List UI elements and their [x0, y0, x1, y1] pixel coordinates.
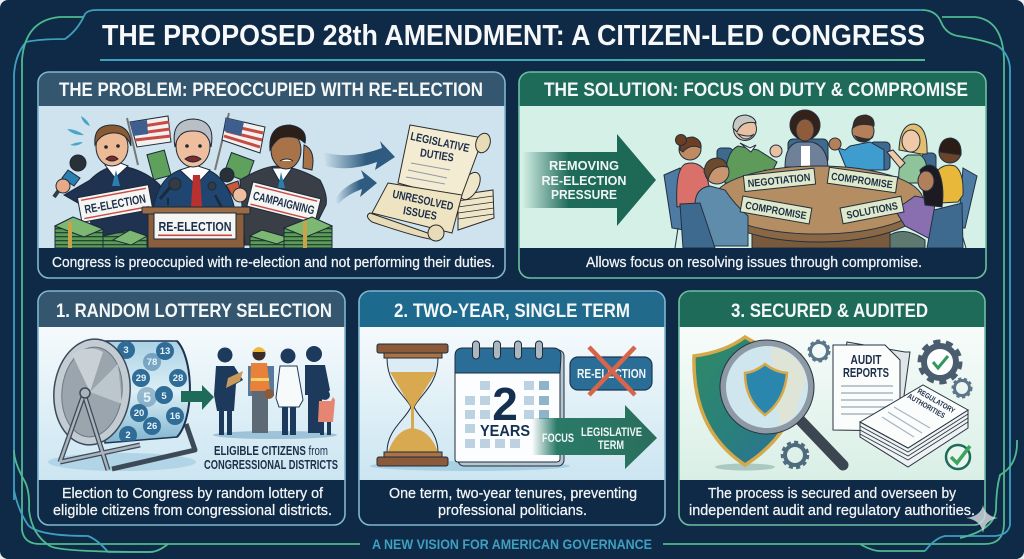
figure: right politician [240, 125, 326, 245]
lottery heading: 1. RANDOM LOTTERY SELECTION [56, 301, 332, 322]
panel: random lottery selection [38, 291, 345, 525]
lottery balls: 5 [143, 389, 151, 405]
label: congressional districts: CONGRESSIONAL DISTRICTS [204, 458, 338, 472]
term heading: 2. TWO-YEAR, SINGLE TERM [394, 301, 630, 322]
person: woman in centre [785, 110, 828, 167]
arrow: focus on legislative term: FOCUS [542, 433, 574, 445]
arrow: to citizens [181, 385, 214, 410]
term caption: professional politicians. [438, 503, 587, 519]
arrow: removing re-election pressure: PRESSURE [551, 187, 617, 202]
citizen: child [318, 390, 335, 435]
icon: cash behind politicians [147, 150, 254, 181]
icon: calendar [455, 341, 564, 466]
icon: money stacks left [55, 217, 147, 248]
person: woman in purple [890, 165, 943, 248]
drum body [100, 341, 190, 443]
problem heading: THE PROBLEM: PREOCCUPIED WITH RE-ELECTION [59, 80, 483, 101]
arrow: removing re-election pressure: RE-ELECTION [542, 173, 626, 188]
calendar number: 2 [492, 378, 518, 430]
drum face [49, 335, 135, 449]
figure: left politician [64, 125, 162, 250]
illustration: eligible citizens [213, 346, 337, 439]
chair front right [927, 203, 963, 248]
solution caption: Allows focus on resolving issues through compromise. [586, 255, 922, 271]
table [713, 166, 923, 248]
lottery border [38, 291, 345, 525]
solution caption band [519, 248, 986, 278]
icon: sparkle [966, 505, 998, 533]
lottery caption: eligible citizens from congressional districts. [53, 503, 332, 519]
term header band [359, 291, 665, 327]
sign: re-election left: RE-ELECTION [83, 191, 147, 217]
icon: handheld microphone left [54, 155, 86, 197]
illustration: stressed politicians at podium [54, 113, 332, 250]
person: man in yellow [938, 138, 963, 203]
person: man seen from behind [695, 158, 748, 246]
icon: audit reports document: AUDIT [850, 352, 882, 367]
arrow: focus on legislative term: LEGISLATIVE [581, 427, 642, 439]
chair front left [680, 203, 715, 248]
lottery caption band [38, 480, 345, 525]
chairs back row [717, 139, 936, 181]
illustration: lottery drum [48, 335, 196, 471]
figure: centre politician [153, 119, 235, 210]
audit caption [689, 486, 975, 519]
solution header band [519, 72, 986, 106]
document: unresolved issues: UNRESOLVED [391, 189, 454, 213]
sign: solutions: SOLUTIONS [846, 200, 899, 222]
term caption: One term, two-year tenures, preventing [389, 486, 637, 502]
icon: small gear right [953, 379, 971, 397]
citizen: doctor [276, 348, 303, 435]
sign: compromise top: COMPROMISE [830, 171, 893, 191]
calendar rings [472, 341, 542, 359]
illustration: citizens around a table [664, 110, 977, 248]
solution border [519, 72, 986, 278]
sign: podium re-election [154, 213, 236, 239]
sign: re-election left [77, 185, 153, 222]
citizen: man silhouette [305, 346, 330, 433]
sign: podium re-election: RE-ELECTION [158, 219, 232, 234]
term caption band [359, 480, 665, 525]
document: legislative duties: LEGISLATIVE [409, 131, 471, 155]
audit caption: independent audit and regulatory authorities. [689, 503, 975, 519]
arrow: removing re-election pressure: REMOVING [549, 158, 619, 173]
term border [359, 291, 665, 525]
title: THE PROPOSED 28th AMENDMENT: A CITIZEN-LED CONGRESS [102, 20, 925, 52]
audit caption: The process is secured and overseen by [708, 486, 957, 502]
icon: regulatory authorities stack: AUTHORITIES [906, 391, 947, 420]
drum stand [60, 388, 140, 470]
lottery header band [38, 291, 345, 327]
solution heading: THE SOLUTION: FOCUS ON DUTY & COMPROMISE [544, 80, 968, 101]
lottery balls: 5 [161, 391, 167, 402]
arrow: focus on legislative term [532, 405, 657, 469]
badge: crossed out re-election [570, 347, 652, 395]
panel: secured and audited [679, 291, 985, 525]
lottery balls [117, 341, 187, 444]
label: eligible citizens: ELIGIBLE CITIZENS from [214, 444, 328, 458]
calendar day squares [465, 381, 549, 448]
chair side left [664, 168, 684, 248]
arrows: duties ignored [323, 141, 395, 204]
lottery balls: 29 [136, 373, 146, 384]
shadow under objects [370, 461, 570, 471]
icon: paper stack [456, 169, 494, 230]
person: blonde woman [887, 124, 927, 183]
document: unresolved issues [367, 183, 462, 241]
arrow: focus on legislative term: TERM [598, 440, 624, 452]
panel: two-year single term [359, 291, 665, 525]
lottery balls: 28 [173, 373, 183, 384]
icon: podium [142, 207, 250, 248]
audit heading: 3. SECURED & AUDITED [731, 301, 928, 322]
citizen shadows [213, 431, 337, 439]
arrow: removing re-election pressure [522, 134, 656, 226]
lottery balls: 13 [160, 346, 170, 357]
drum stand rear [112, 424, 195, 469]
icon: shield [694, 337, 800, 465]
chair side right [958, 168, 977, 248]
icon: microphones on podium [160, 178, 222, 208]
icon: handheld microphone right [220, 168, 247, 202]
sign: compromise bottom: COMPROMISE [744, 200, 807, 222]
icon: hourglass [377, 344, 448, 466]
lottery balls: 78 [147, 357, 157, 368]
shield shadow [715, 464, 775, 470]
lottery balls: 26 [147, 421, 157, 432]
person: older man in green [725, 115, 782, 183]
icon: american flag right [215, 113, 265, 170]
icon: regulatory authorities stack: REGULATORY [916, 386, 957, 415]
icon: small gear top [809, 341, 829, 361]
problem caption: Congress is preoccupied with re-election and not performing their duties. [52, 255, 495, 271]
calendar label: YEARS [480, 423, 530, 440]
icon: small gear bottom [782, 442, 808, 468]
icon: regulatory authorities stack [860, 385, 968, 467]
drum rim [177, 341, 190, 437]
sign: campaigning: CAMPAIGNING [252, 189, 316, 217]
problem caption band [38, 248, 505, 278]
icon: audit reports document [833, 342, 910, 431]
icon: american flag left [127, 116, 171, 165]
lottery balls: 2 [125, 430, 131, 441]
lottery balls: 3 [123, 345, 129, 356]
icon: magnifying glass [720, 340, 843, 465]
audit header band [679, 291, 985, 327]
icon: gear with check [920, 342, 960, 382]
sign: campaigning [247, 182, 321, 223]
icon: audit reports document: REPORTS [843, 365, 889, 380]
icon: check circle [946, 445, 970, 469]
document: legislative duties [398, 125, 493, 200]
document: unresolved issues: ISSUES [402, 205, 438, 223]
audit border [679, 291, 985, 525]
icon: sweat drops [67, 116, 90, 146]
citizen: construction worker [248, 347, 274, 433]
sign: negotiation: NEGOTIATION [747, 172, 811, 190]
lottery balls: 20 [134, 408, 144, 419]
footer tagline: A NEW VISION FOR AMERICAN GOVERNANCE [372, 536, 652, 552]
lottery balls: 16 [170, 411, 180, 422]
term caption [389, 486, 637, 519]
audit caption band [679, 480, 985, 525]
person: woman in pink [676, 134, 712, 207]
problem border [38, 72, 505, 278]
illustration: legislative duties scroll [367, 125, 494, 241]
icon: money stacks right [250, 217, 332, 248]
panel: the solution [519, 72, 986, 278]
citizen: woman with clipboard [214, 348, 243, 435]
problem header band [38, 72, 505, 106]
panel: the problem [38, 72, 505, 278]
stand shadow [48, 453, 196, 471]
person: man in blue shirt [829, 115, 884, 170]
badge: crossed out re-election: RE-ELECTION [577, 366, 646, 381]
lottery caption [53, 486, 332, 519]
lottery caption: Election to Congress by random lottery of [62, 486, 324, 502]
document: legislative duties: DUTIES [419, 147, 455, 165]
title underline [100, 59, 925, 61]
